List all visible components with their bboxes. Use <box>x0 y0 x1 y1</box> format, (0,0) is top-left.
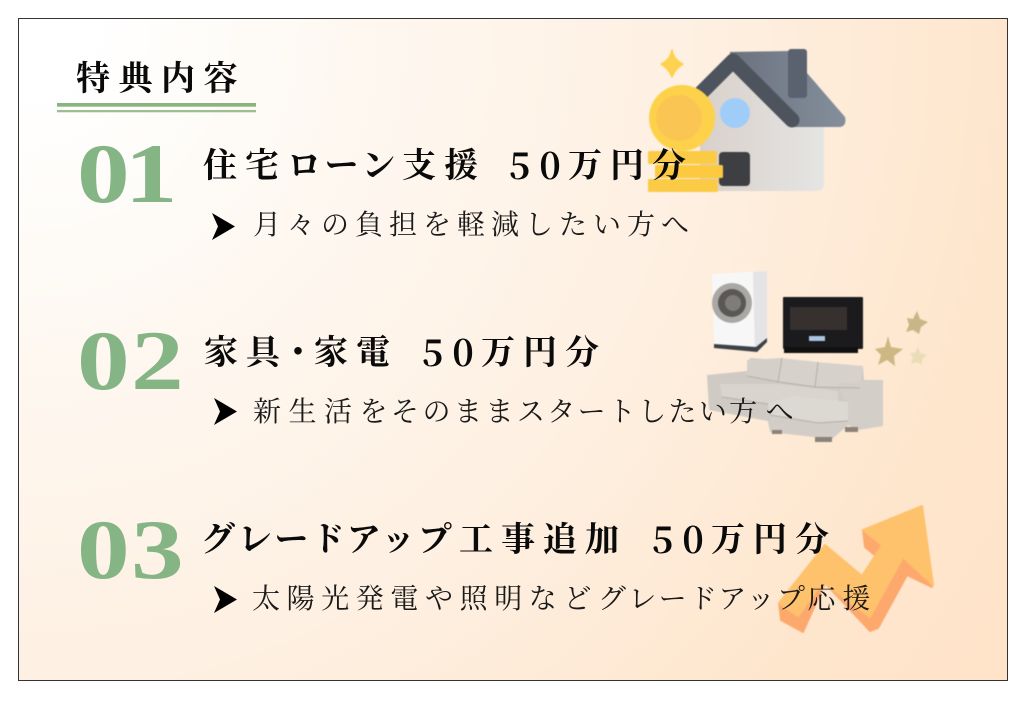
icon: house with coins <box>647 48 846 193</box>
item 1 heading: 支援 <box>402 148 486 185</box>
item 1 arrow <box>212 213 235 240</box>
item 3 heading <box>201 513 837 564</box>
item 1 description: 月々の負担を軽減したい方へ <box>253 210 695 241</box>
item 2 heading: 万円分 <box>481 335 607 372</box>
item 3 heading: グレードアップ <box>201 522 454 559</box>
item 1 heading: 住宅 <box>203 148 287 185</box>
stars <box>875 336 903 366</box>
sofa <box>707 358 883 442</box>
item 3 heading: 万円分 <box>711 522 837 559</box>
item 3 number: 03 <box>77 503 185 597</box>
item 1 heading: ローン <box>287 148 399 185</box>
title: 特典内容 <box>76 61 246 98</box>
item 1 heading <box>203 139 694 190</box>
item 2 heading: 50 <box>422 326 483 377</box>
icon: washer, microwave, sofa and stars <box>706 271 928 443</box>
item 2 heading: 家具 <box>204 335 288 372</box>
item 2 heading <box>204 326 607 377</box>
item 2 heading: ・ <box>281 335 323 372</box>
item 1 heading: 50 <box>509 139 570 190</box>
item 2 arrow <box>214 398 237 425</box>
item 3 arrow <box>214 586 237 613</box>
washer <box>712 271 767 352</box>
item 2 heading: 家電 <box>314 335 398 372</box>
icon: rising orange arrow <box>778 504 934 634</box>
microwave <box>783 297 863 353</box>
item 1 number: 01 <box>77 127 172 221</box>
item 1 heading: 万円分 <box>568 148 694 185</box>
item 3 heading: 工事追加 <box>459 522 627 559</box>
item 3 description: 太陽光発電や照明などグレードアップ応援 <box>252 584 877 615</box>
item 2 description: 新生活をそのままスタートしたい方へ <box>253 397 800 428</box>
heading underline <box>57 103 256 112</box>
item 3 heading: 50 <box>652 513 713 564</box>
item 2 number: 02 <box>77 314 185 408</box>
